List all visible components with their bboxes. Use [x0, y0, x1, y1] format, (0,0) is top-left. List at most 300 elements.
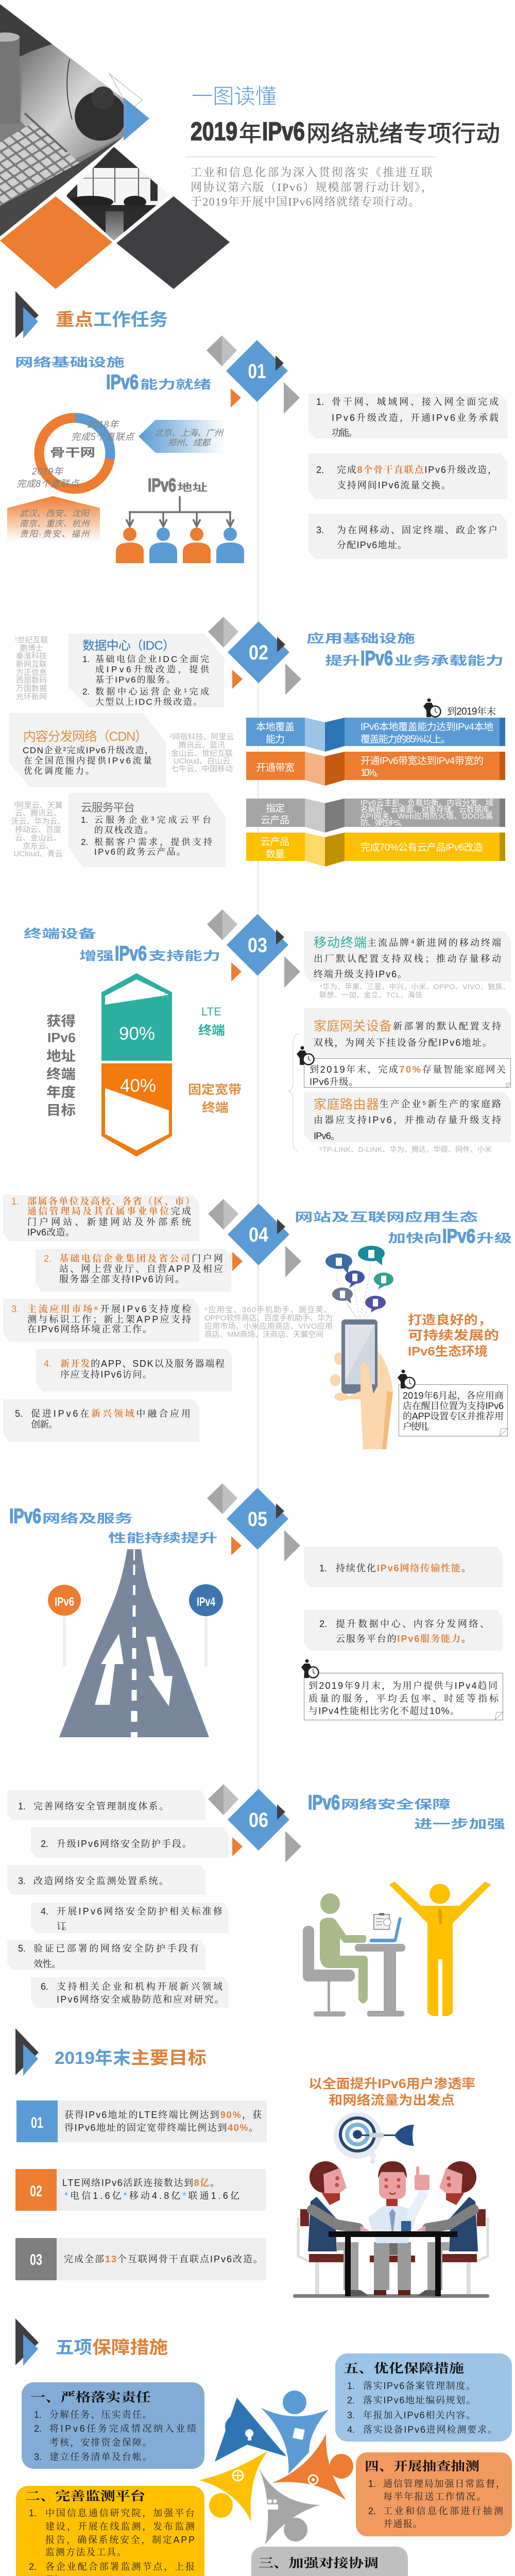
goal 01: 获得IPv6地址的LTE终端比例达到90%，获	[64, 2110, 262, 2120]
ribbon row: 开通带宽	[246, 752, 505, 786]
panel: 一、严格落实责任: 1.	[34, 2410, 42, 2420]
goal 02: *电信1.6亿*移动4.8亿*联通1.6亿	[64, 2191, 239, 2201]
ribbon row: 开通带宽: 10%。	[360, 768, 384, 778]
section heading: 五项保障措施	[15, 2318, 168, 2366]
label 2019: 2019年	[31, 466, 64, 477]
panel: 04 task 5: 5.	[15, 1409, 23, 1419]
panel: IDC	[68, 634, 224, 707]
label: 获得IPv6地址终端年度目标: 地址	[46, 1048, 76, 1064]
heading text: 主要目标	[131, 2048, 207, 2068]
dotted bracket	[288, 1033, 298, 1151]
panel: 家庭网关设备: 家庭网关设备	[314, 1016, 392, 1035]
ribbon row: 本地覆盖能力: 覆盖能力的85%以上。	[360, 734, 451, 745]
heading: 应用基础设施 提升IPv6业务承载能力: 提升	[325, 654, 360, 667]
panel: CDN: 在全国范围内提供IPv6流量	[24, 756, 152, 766]
footnote 1: 新网互联	[16, 660, 47, 669]
ribbon row: 指定云产品: 名解析、云桌面、对象存储、云数据库、	[360, 805, 497, 814]
panel: 06 task 3: 3.	[18, 1876, 26, 1886]
panel: 04 task 2: 2.	[44, 1253, 52, 1264]
callout: 2018 cities: 北京、上海、广州	[154, 428, 224, 438]
heading: IPv6网络安全保障 进一步加强: 进一步加强	[414, 1817, 505, 1831]
ribbon row: 本地覆盖能力: 本地覆盖	[256, 721, 295, 733]
panel: IDC: 成IPv6升级改造，提供	[95, 665, 210, 674]
ribbon row: 指定云产品: IPv6云主机、负载均衡、内容分发、域	[360, 799, 493, 807]
panel: CDN	[9, 713, 166, 787]
donut center label: 骨干网	[50, 444, 95, 460]
footnote 2: ²网宿科技、阿里云	[170, 733, 234, 741]
panel: 四、开展抽查抽测: 工业和信息化部进行抽测	[383, 2506, 503, 2516]
heading: IPv6网络安全保障 进一步加强: IPv6	[308, 1791, 340, 1814]
panel: 04 task 2: 基础电信企业集团及省公司门户网	[59, 1253, 223, 1264]
panel: 家庭网关设备: 新部署的默认配置支持	[393, 1021, 501, 1031]
goal 01	[16, 2100, 267, 2142]
illustration: worker and cheering man	[303, 1882, 491, 2016]
heading text: 保障措施	[92, 2338, 168, 2358]
panel: 一、严格落实责任: 考核，安排资金保障。	[49, 2437, 152, 2448]
callout: 打造良好的: 打造良好的，	[408, 1313, 492, 1327]
badge 05	[207, 1483, 300, 1562]
panel: 04 task 1: 1.	[11, 1196, 19, 1207]
callout: 2018 cities	[139, 420, 225, 453]
icon: section arrow	[15, 2028, 39, 2076]
panel: 06 task 3: 改造网络安全监测处置系统。	[33, 1876, 168, 1886]
footnote 4: ⁴华为、苹果、三星、中兴、小米、OPPO、VIVO、魅族、	[319, 982, 510, 991]
panel: cloud platform: IPv6的政务云产品。	[94, 847, 185, 857]
heading: IPv6网络安全保障 进一步加强	[308, 1791, 505, 1831]
panel: 移动终端: 主流品牌⁴新进网的移动终端	[367, 938, 501, 948]
dashed links	[336, 1262, 382, 1319]
panel: 04 task 5: 创新。	[31, 1419, 58, 1430]
badge 02	[208, 617, 301, 695]
label: 获得IPv6地址终端年度目标: 获得	[46, 1013, 76, 1029]
panel: 五、优化保障措施: 3.	[347, 2410, 355, 2420]
label: LTE terminal: 终端	[198, 1024, 225, 1038]
panel: 01 task 1	[308, 394, 507, 438]
panel: 06 task 1: 1.	[18, 1801, 26, 1811]
panel: 04 task 3	[3, 1299, 199, 1342]
footnote 3: UCloud、青云	[13, 850, 63, 858]
section heading: 2019年末主要目标	[15, 2028, 207, 2076]
callout: 打造良好的	[408, 1313, 499, 1359]
footnote 1: 秦淮科技	[16, 652, 47, 660]
panel: 04 task 1: 门户网站、新建网站及外部系统	[27, 1217, 191, 1227]
footnote 6: OPPO软件商店、百度手机助手、华为	[204, 1314, 333, 1323]
figure: gray	[259, 2468, 320, 2545]
label: 获得IPv6地址终端年度目标: 终端	[46, 1066, 76, 1082]
panel: 家庭网关设备: 双栈，为网关下挂设备分配IPv6地址。	[314, 1038, 492, 1048]
heading text: 重点	[56, 310, 93, 330]
hexagon gauge: 40%	[120, 1076, 156, 1096]
panel: 四、开展抽查抽测	[356, 2452, 512, 2536]
photo: desk with keyboard	[0, 0, 126, 242]
panel: 01 task 3: 为在网移动、固定终端、政企客户	[337, 525, 497, 535]
dark diamond	[116, 196, 230, 289]
label 2019	[16, 466, 80, 489]
panel: 06 task 2	[31, 1827, 229, 1858]
panel: CDN: 优化调度能力。	[24, 766, 94, 776]
panel: 一、严格落实责任: 一、严格落实责任	[30, 2391, 151, 2404]
panel: 04 task 3: 主流应用市场⁶开展IPv6支持度检	[27, 1303, 191, 1314]
panel: 五、优化保障措施: 1.	[347, 2381, 355, 2391]
footnote 3: 京东云、	[23, 842, 54, 851]
label 2018	[71, 419, 135, 442]
panel: cloud platform: 2.	[81, 837, 88, 847]
badge 01	[207, 335, 300, 414]
panel: 06 task 5	[7, 1940, 205, 1970]
label 2018: 2018年	[87, 419, 119, 430]
badge 04	[208, 1199, 301, 1277]
goal 02	[15, 2169, 266, 2211]
icon: clock man	[398, 1369, 415, 1388]
floor	[293, 2294, 489, 2298]
heading: 网站及互联网应用生态 加快向IPv6升级	[295, 1210, 512, 1247]
goal 01: 得IPv6地址的固定宽带终端比例达到40%。	[64, 2123, 258, 2133]
label: IPv6	[148, 474, 176, 496]
title rule	[185, 157, 435, 158]
panel: 二、完善监测平台: 中国信息通信研究院，加强平台	[45, 2508, 195, 2518]
footnote 1: 方正信息	[16, 668, 47, 677]
panel: 05 task 2	[304, 1610, 503, 1651]
panel: 01 task 2: 2.	[316, 465, 324, 475]
callout: 打造良好的: 可持续发展的	[408, 1329, 499, 1343]
badge 01: 01	[248, 360, 266, 383]
goal 02: 02	[30, 2183, 42, 2200]
heading: 终端设备 增强IPv6支持能力	[24, 927, 220, 965]
panel: 四、开展抽查抽测: 通信管理局加强日常监督，	[383, 2479, 505, 2489]
small white icons	[233, 2428, 318, 2510]
intro paragraph: 网协议第六版（IPv6）规模部署行动计划》，	[191, 181, 433, 194]
heading: IPv6网络及服务 性能持续提升	[9, 1505, 217, 1545]
panel: 家庭路由器: IPv6。	[314, 1131, 340, 1141]
panel: 二、完善监测平台: 2.	[29, 2562, 37, 2572]
panel: 06 task 2: 升级IPv6网络安全防护手段。	[57, 1839, 192, 1849]
ribbon row: 指定云产品: 防、弹性IPS。	[360, 819, 407, 827]
goal 03	[15, 2238, 266, 2280]
panel: 06 task 5: 效性。	[33, 1959, 61, 1969]
heading: 网站及互联网应用生态 加快向IPv6升级: 升级	[476, 1231, 512, 1245]
panel: 家庭路由器: 生产企业⁵新生产的家庭路	[380, 1099, 501, 1109]
footnote 3: 沃云、华为云、	[11, 817, 65, 826]
lane dashes	[131, 1549, 138, 1737]
panel: 06 task 1: 完善网络安全管理制度体系。	[33, 1801, 168, 1811]
icon: section arrow	[15, 291, 39, 338]
blue triangle	[124, 97, 149, 141]
panel: cloud platform: 根据客户需求，提供支持	[94, 837, 212, 847]
callout: Sept 2019 note: 质量的服务，平均丢包率、时延等指标	[308, 1693, 499, 1704]
chair	[303, 1926, 355, 2016]
IPv6 address allocation diagram	[116, 474, 244, 563]
panel: 五、优化保障措施: 2.	[347, 2395, 355, 2405]
panel: 04 task 4: 新开发的APP、SDK以及服务器端程	[60, 1359, 225, 1369]
heading: 网络基础设施 IPv6能力就绪	[15, 355, 211, 394]
callout: 70% gateway	[304, 1058, 511, 1088]
heading: 应用基础设施 提升IPv6业务承载能力: 应用基础设施	[306, 632, 415, 645]
label: LTE terminal	[198, 1005, 225, 1038]
people icons	[116, 528, 244, 563]
panel: 移动终端	[304, 931, 511, 981]
panel: cloud platform	[68, 793, 226, 867]
heading: 终端设备 增强IPv6支持能力: 增强	[79, 949, 114, 962]
panel: CDN: CDN企业²完成IPv6升级改造，	[23, 745, 153, 755]
footnote 4	[319, 982, 510, 999]
callout: Sept 2019 note: 与IPv4性能相比劣化不超过10%。	[308, 1705, 459, 1716]
figure: orange	[272, 2434, 353, 2500]
panel: 移动终端: 终端升级支持IPv6。	[314, 969, 407, 979]
goal 03: 完成全部13个互联网骨干直联点IPv6改造。	[64, 2254, 263, 2264]
LTE 90% fill	[101, 973, 172, 1061]
panel: 06 task 4	[31, 1903, 229, 1933]
panel: 五、优化保障措施: 4.	[347, 2425, 355, 2435]
heading: 网络基础设施 IPv6能力就绪: 网络基础设施	[15, 355, 125, 369]
heading: 网站及互联网应用生态 加快向IPv6升级: 网站及互联网应用生态	[295, 1210, 478, 1224]
panel: 家庭网关设备	[304, 1008, 511, 1058]
panel: 家庭路由器: 家庭路由器	[314, 1094, 379, 1113]
panel: IDC: 2.	[82, 687, 90, 697]
callout: 以全面提升: 和网络流量为出发点	[329, 2093, 455, 2108]
panel: 二、完善监测平台	[16, 2486, 204, 2576]
panel: cloud platform: 的双栈改造。	[94, 825, 153, 835]
photo: meeting room	[66, 147, 169, 241]
ribbon row: 开通带宽: 开通IPv6带宽达到IPv4带宽的	[360, 755, 484, 767]
figure: dark blue	[215, 2398, 286, 2462]
footnote 1: 鹏博士	[20, 644, 43, 653]
callout: 以全面提升	[308, 2076, 475, 2108]
panel: 二、完善监测平台: 1.	[29, 2508, 37, 2518]
sign: IPv6: IPv6	[55, 1595, 74, 1609]
badge 02: 02	[249, 641, 268, 664]
heading text	[56, 2338, 168, 2358]
label: 地址	[177, 482, 208, 494]
panel: 06 task 6: 支持相关企业和机构开展新兴领域	[57, 1981, 222, 1992]
panel: 04 task 4	[36, 1349, 232, 1392]
header photo collage	[0, 0, 230, 289]
callout: Sept 2019 note: 到2019年9月末，为用户提供与IPv4趋同	[308, 1680, 497, 1691]
panel: IDC: 基于IPv6的服务。	[95, 675, 175, 685]
panel: 05 task 2: 云服务平台的IPv6服务能力。	[336, 1633, 471, 1644]
callout: 2019 cities	[7, 496, 100, 542]
orange diamond	[0, 196, 112, 289]
panel: 五、优化保障措施: 五、优化保障措施	[344, 2362, 464, 2376]
heading text: 2019年末	[55, 2048, 131, 2068]
label	[148, 474, 208, 496]
callout: 2019 cities: 南京、重庆、杭州	[20, 519, 91, 529]
icon: clock man	[423, 699, 441, 717]
goal 02: LTE网络IPv6活跃连接数达到8亿。	[62, 2178, 219, 2188]
panel: 四、开展抽查抽测: 1.	[368, 2479, 376, 2489]
panel: 01 task 1: 1.	[316, 397, 324, 407]
section heading: 重点工作任务	[15, 291, 168, 338]
ribbon row: 云产品数量: 数量	[266, 849, 285, 860]
ribbon row: 本地覆盖能力	[246, 718, 505, 752]
heading: 终端设备 增强IPv6支持能力: 终端设备	[24, 927, 96, 940]
heading text	[56, 310, 168, 330]
main title	[191, 115, 500, 148]
heading: 网站及互联网应用生态 加快向IPv6升级: 加快向	[388, 1231, 442, 1245]
panel: cloud platform: 云服务企业³完成云平台	[94, 815, 211, 825]
badge 04: 04	[249, 1224, 269, 1246]
panel: 06 task 4: 4.	[41, 1906, 48, 1917]
panel: 06 task 4: 开展IPv6网络安全防护相关标准修	[57, 1906, 222, 1917]
ribbon row: 指定云产品: 云产品	[261, 815, 289, 826]
intro paragraph	[191, 166, 433, 208]
panel: IDC: 大型以上IDC升级改造。	[95, 697, 202, 707]
label 2019: 完成8个直联点	[16, 479, 80, 489]
ribbon row: 云产品数量: 完成70%公有云产品IPv6改造	[360, 842, 483, 853]
panel: 06 task 1	[7, 1790, 205, 1820]
heading: 网站及互联网应用生态 加快向IPv6升级: IPv6	[442, 1226, 475, 1247]
panel: 一、严格落实责任: 将IPv6任务完成情况纳入业绩	[49, 2424, 196, 2434]
footnote 2: 金山云、世纪互联	[171, 749, 233, 758]
footnote 6	[204, 1305, 333, 1339]
badge 06: 06	[249, 1809, 268, 1832]
panel: 04 task 5: 促进IPv6在新兴领域中融合应用	[31, 1408, 191, 1419]
footnote 2: 腾讯云、蓝汛	[179, 741, 225, 750]
panel: 家庭路由器: 由器应支持IPv6，并推动存量升级支持	[314, 1115, 501, 1125]
panel: 06 task 6: 6.	[41, 1981, 48, 1992]
footnote 1	[14, 636, 48, 701]
callout: 以全面提升: 以全面提升IPv6用户渗透率	[308, 2076, 475, 2091]
panel: 01 task 3: 分配IPv6地址。	[337, 540, 407, 550]
main title: IPv6	[262, 117, 305, 146]
heading: 应用基础设施 提升IPv6业务承载能力	[306, 632, 504, 670]
panel: 05 task 2: 提升数据中心、内容分发网络、	[336, 1619, 489, 1629]
panel: 四、开展抽查抽测: 四、开展抽查抽测	[365, 2460, 479, 2473]
panel: 01 task 3: 3.	[316, 525, 324, 535]
label: fixed broadband terminal: 固定宽带	[188, 1083, 242, 1097]
label: 到2019年末: 到2019年末	[447, 706, 496, 717]
callout: 2019 cities: 贵阳·贵安、福州	[20, 530, 91, 539]
heading: 终端设备 增强IPv6支持能力: IPv6	[115, 942, 147, 965]
arrow up	[95, 1634, 124, 1705]
badge 03: 03	[248, 934, 267, 957]
label: 获得IPv6地址终端年度目标: 年度	[46, 1084, 76, 1100]
goal 03: 03	[30, 2251, 42, 2268]
panel: 二、完善监测平台: 监测方法及工具。	[45, 2547, 126, 2557]
callout: 打造良好的: IPv6生态环境	[408, 1345, 488, 1359]
kicker: 一图读懂: 一图读懂	[192, 84, 277, 108]
panel: 04 task 4: 序应支持IPv6访问。	[60, 1369, 152, 1380]
hand fingers	[330, 1352, 349, 1401]
panel: IDC: 数据中心（IDC）	[82, 639, 175, 653]
illustration: road	[59, 1549, 209, 1737]
panel: 04 task 2	[36, 1249, 231, 1292]
panel: 一、严格落实责任	[22, 2382, 204, 2469]
icon: clock man	[301, 1659, 318, 1678]
phone	[341, 1319, 377, 1394]
panel: 三、加强对接协调	[251, 2547, 408, 2576]
hexagon gauge	[101, 973, 172, 1157]
title	[191, 84, 500, 148]
panel: 05 task 1: 1.	[319, 1563, 327, 1573]
main title: 年	[239, 115, 262, 148]
panel: 一、严格落实责任: 建立任务清单及台帐。	[49, 2452, 152, 2462]
footnote 6: ⁶应用宝、360手机助手、豌豆荚、	[204, 1305, 332, 1314]
laptop	[370, 1918, 402, 1942]
panel: 五、优化保障措施	[335, 2353, 512, 2442]
badge 05: 05	[248, 1508, 267, 1531]
cheering person	[389, 1882, 491, 2016]
icon: section arrow	[15, 2318, 39, 2366]
ribbon row: 指定云产品	[246, 799, 505, 833]
panel: 01 task 1: 功能。	[332, 428, 357, 438]
footnote 3	[11, 801, 65, 858]
panel: 06 task 5: 5.	[18, 1943, 26, 1954]
panel: CDN: 内容分发网络（CDN）	[23, 730, 148, 744]
label: 获得IPv6地址终端年度目标: IPv6	[47, 1030, 76, 1045]
heading: IPv6网络及服务 性能持续提升: 网络及服务	[42, 1512, 133, 1525]
panel: 04 task 3: 测与标识工作；新上架APP应支持	[27, 1314, 191, 1325]
panel: 五、优化保障措施: 年报加入IPv6相关内容。	[363, 2410, 475, 2420]
panel: 家庭路由器	[304, 1092, 511, 1142]
intro paragraph: 工业和信息化部为深入贯彻落实《推进互联	[191, 166, 433, 179]
thought bubble with target and dart	[334, 2112, 414, 2164]
panel: 四、开展抽查抽测: 每半年报送工作情况。	[383, 2491, 486, 2502]
panel: 二、完善监测平台: 报告，确保系统安全，制定APP	[45, 2534, 195, 2545]
footnote 3: 移动云、百度	[15, 825, 61, 834]
panel: IDC: 1.	[82, 654, 90, 664]
footnote 1: ¹世纪互联	[14, 636, 48, 645]
panel: 01 task 2: 支持网间IPv6流量交换。	[337, 480, 451, 490]
panel: 五、优化保障措施: 落实设备IPv6进网检测要求。	[363, 2425, 497, 2435]
footnote 5: ⁵TP-LINK、D-LINK、华为、腾达、华硕、网件、小米	[319, 1145, 492, 1154]
callout: June 2019 app store note: 店在醒目位置为支持IPv6	[403, 1401, 504, 1411]
panel: 05 task 1	[304, 1547, 503, 1587]
illustration: meeting with target	[293, 2112, 489, 2298]
panel: 01 task 3	[308, 514, 507, 559]
ribbon row: 云产品数量: 云产品	[261, 836, 289, 848]
center timeline line	[258, 402, 259, 1790]
tree arrows	[126, 496, 234, 527]
footnote 3: ³阿里云、天翼	[13, 801, 63, 810]
panel: 04 task 2: 服务器全部支持IPv6访问。	[59, 1274, 184, 1284]
label 2018: 完成5个直联点	[71, 432, 135, 442]
ribbon row: 本地覆盖能力: 能力	[266, 734, 285, 745]
panel: 四、开展抽查抽测: 并通报。	[383, 2518, 422, 2529]
broadband 40% fill	[101, 1063, 172, 1157]
goal 01: 01	[31, 2114, 43, 2131]
right man	[416, 2161, 488, 2296]
figure: light blue	[261, 2391, 329, 2474]
label: 获得IPv6地址终端年度目标	[46, 1013, 76, 1118]
panel: 一、严格落实责任: 分解任务、压实责任。	[49, 2410, 152, 2420]
panel: 五、优化保障措施: 落实IPv6地址编码规划。	[363, 2395, 475, 2405]
footnote 1: 西部数码	[16, 676, 47, 685]
panel: cloud platform: 1.	[81, 815, 88, 825]
heading: 网络基础设施 IPv6能力就绪: IPv6	[106, 371, 139, 394]
panel: IDC: 数据中心运营企业¹完成	[95, 687, 209, 697]
panel: 二、完善监测平台: 二、完善监测平台	[25, 2489, 146, 2503]
panel: 01 task 2	[308, 453, 507, 499]
left man	[298, 2161, 370, 2296]
callout: 70% gateway: 到2019年末，完成70%存量智能家庭网关	[310, 1064, 506, 1075]
panel: 二、完善监测平台: 各企业配合部署监测节点，上报	[45, 2561, 195, 2572]
table	[329, 2231, 457, 2296]
panel: 04 task 3: 在IPv6网络环境正常工作。	[27, 1324, 152, 1334]
panel: 01 task 1: IPv6升级改造，开通IPv6业务承载	[332, 413, 499, 423]
badge 06	[208, 1784, 301, 1862]
heading: 应用基础设施 提升IPv6业务承载能力: IPv6	[360, 647, 393, 670]
panel: 04 task 1: IPv6改造。	[27, 1227, 75, 1238]
panel: 一、严格落实责任: 3.	[34, 2452, 42, 2462]
ribbon row: 指定云产品: API网关、Web应用防火墙、DDOS高	[360, 811, 493, 821]
callout: June 2019 app store note: 户使用。	[403, 1421, 435, 1432]
heading: 应用基础设施 提升IPv6业务承载能力: 业务承载能力	[394, 654, 504, 667]
panel: IDC: 基础电信企业IDC全面完	[95, 654, 209, 664]
callout: 2018 cities: 郑州、成都	[167, 438, 212, 448]
footnote 1: 光环新网	[16, 692, 47, 701]
panel: 04 task 3: 3.	[11, 1304, 19, 1314]
central star of five figures	[199, 2391, 353, 2545]
